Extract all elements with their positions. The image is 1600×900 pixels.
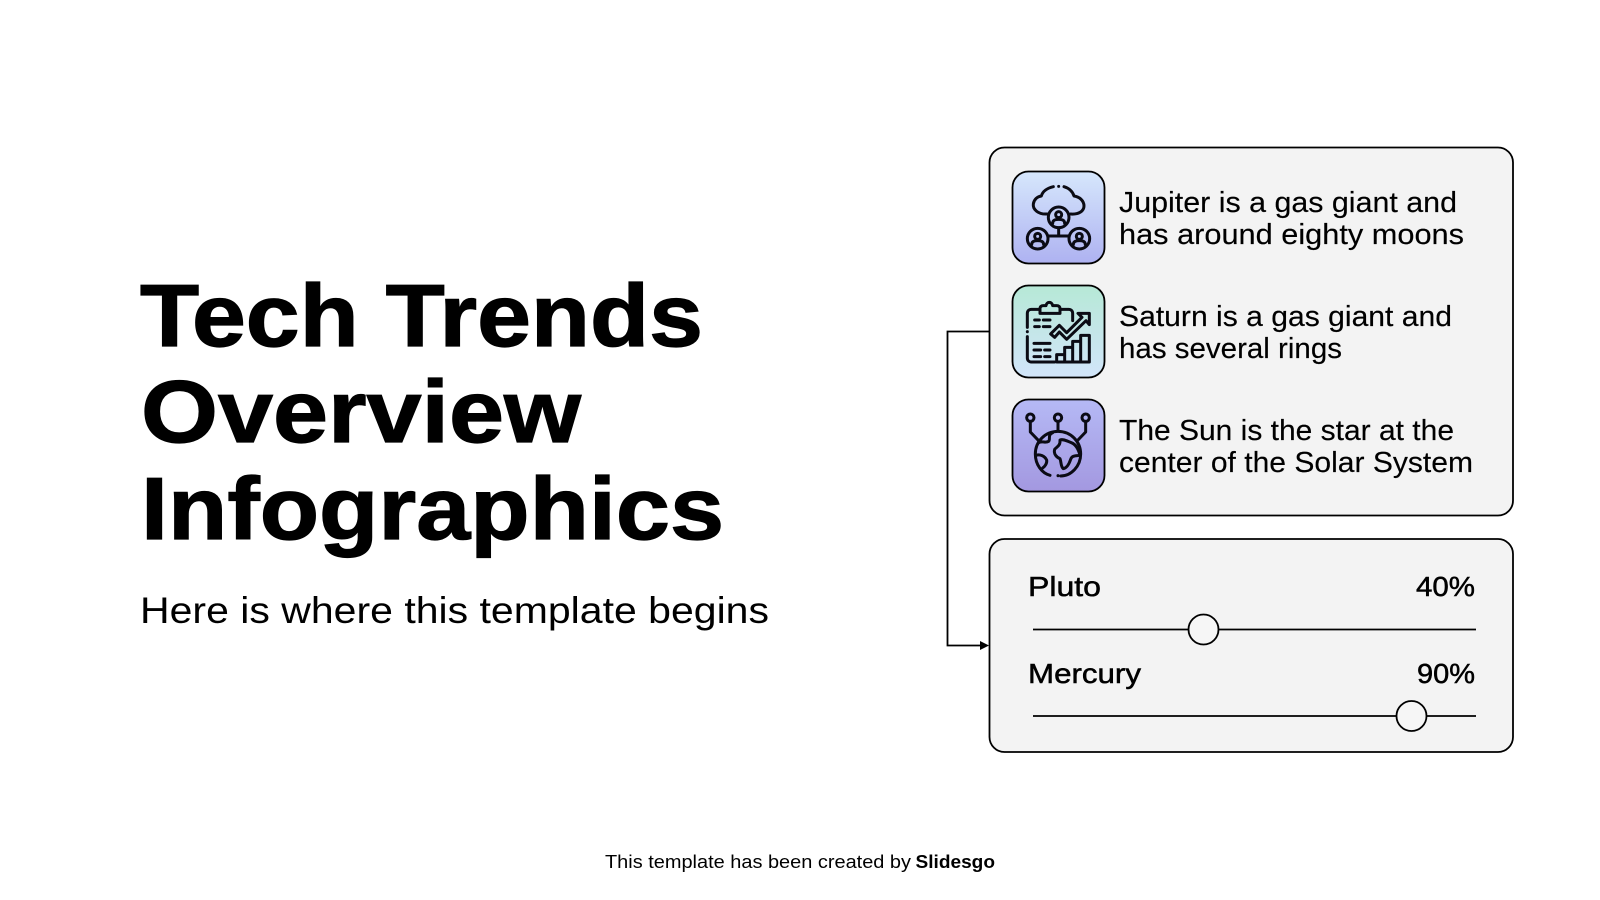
text: Saturn xyxy=(1119,301,1452,365)
arrow: connector between panels xyxy=(948,332,989,650)
text: Sun: The Sun is the star at the xyxy=(1119,415,1454,447)
title: Infographics xyxy=(141,459,724,558)
slider: Mercury 90%: 90% xyxy=(1417,658,1475,689)
title: Tech Trends xyxy=(140,266,703,365)
text: Saturn: has several rings xyxy=(1119,333,1342,365)
text: Saturn: Saturn is a gas giant and xyxy=(1119,301,1452,333)
icon: connected globe xyxy=(1012,400,1104,492)
slider: Pluto 40%: Pluto xyxy=(1028,571,1101,602)
icon: clipboard chart xyxy=(1012,286,1104,378)
slider: Pluto 40% xyxy=(1028,571,1476,644)
icon: cloud network xyxy=(1012,172,1104,264)
slider: Mercury 90% xyxy=(1028,658,1476,731)
title xyxy=(140,266,724,558)
panel: technology items xyxy=(990,148,1513,516)
text: Jupiter: has around eighty moons xyxy=(1119,219,1464,251)
footer credit: This template has been created by xyxy=(605,851,912,872)
text: Jupiter xyxy=(1119,187,1464,251)
panel: sliders xyxy=(990,539,1513,752)
text: Sun: center of the Solar System xyxy=(1119,447,1473,479)
title: Overview xyxy=(141,362,582,461)
slider: Pluto 40%: 40% xyxy=(1416,571,1475,602)
text: Jupiter: Jupiter is a gas giant and xyxy=(1119,187,1457,219)
slider: Mercury 90%: Mercury xyxy=(1028,658,1141,689)
footer credit: Slidesgo xyxy=(916,851,995,872)
subtitle: Here is where this template begins xyxy=(140,590,769,631)
text: Sun xyxy=(1119,415,1473,479)
